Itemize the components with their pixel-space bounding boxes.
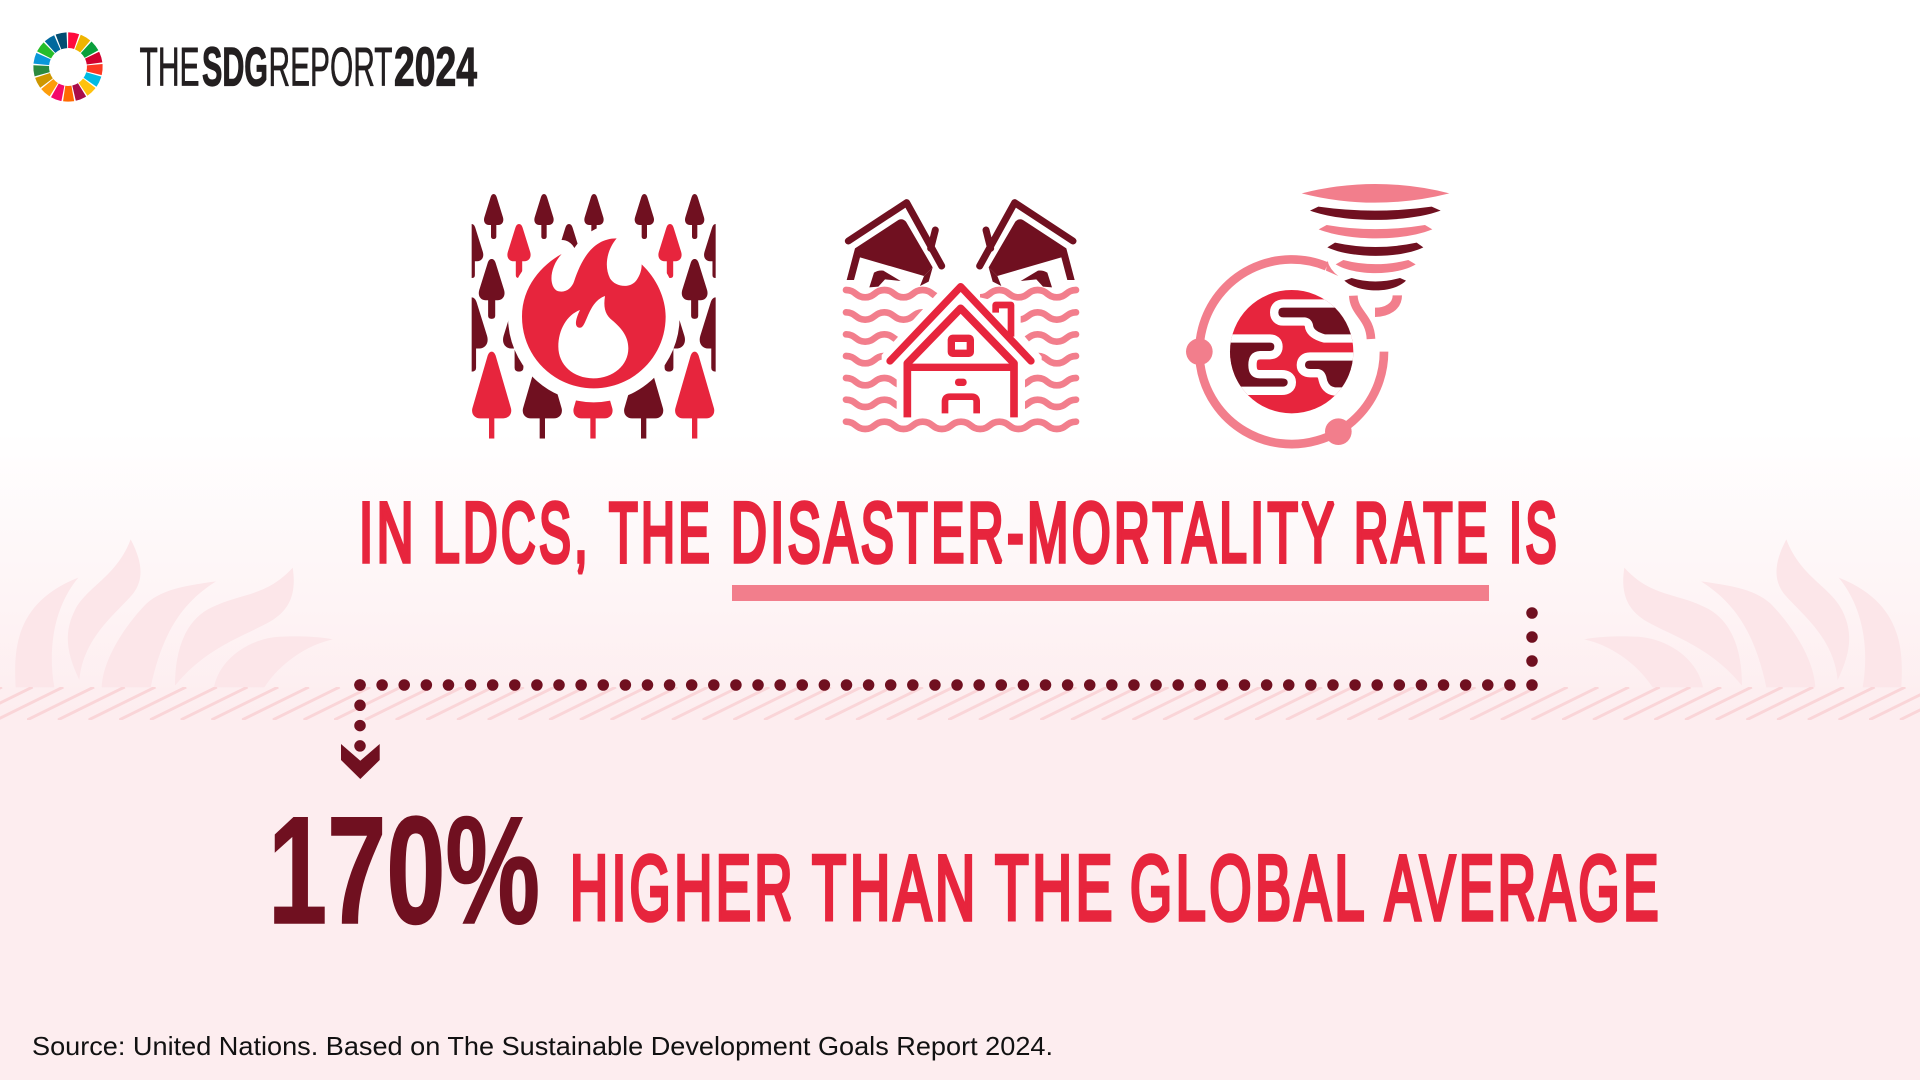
logo wordmark: SDG — [202, 36, 268, 98]
dotted connector arrow — [341, 613, 1532, 779]
icon: flooded houses — [846, 203, 1076, 429]
hatched ground band — [0, 687, 1920, 720]
source note: Source: United Nations. Based on The Sustainable Development Goals Report 2024. — [32, 1031, 1053, 1061]
headline: disaster mortality rate: RATE — [1354, 486, 1491, 580]
logo: SDG colour wheel — [29, 28, 107, 106]
statistic label: THE — [995, 838, 1116, 940]
headline: disaster mortality rate: IN — [359, 486, 417, 580]
logo wordmark — [140, 36, 477, 98]
headline: disaster mortality rate: LDCS, — [433, 486, 591, 580]
logo wordmark: 2024 — [394, 36, 477, 98]
statistic label: AVERAGE — [1385, 838, 1662, 940]
headline: disaster mortality rate: DISASTER-MORTALITY — [731, 486, 1338, 580]
icon: forest fire — [472, 194, 716, 439]
statistic label: THAN — [812, 838, 979, 940]
statistic label: GLOBAL — [1130, 838, 1368, 940]
headline: disaster mortality rate: IS — [1509, 486, 1560, 580]
logo wordmark: THE — [140, 36, 200, 98]
headline underline — [732, 585, 1489, 601]
decorative flames left — [15, 539, 333, 687]
icon: tornado and globe — [1186, 184, 1449, 445]
statistic label: HIGHER — [570, 838, 796, 940]
logo wordmark: REPORT — [268, 36, 392, 98]
statistic: 170%: 170% — [268, 785, 540, 956]
headline: disaster mortality rate — [359, 486, 1560, 580]
headline: disaster mortality rate: THE — [609, 486, 713, 580]
statistic label — [570, 838, 1662, 940]
decorative flames right — [1584, 539, 1902, 687]
